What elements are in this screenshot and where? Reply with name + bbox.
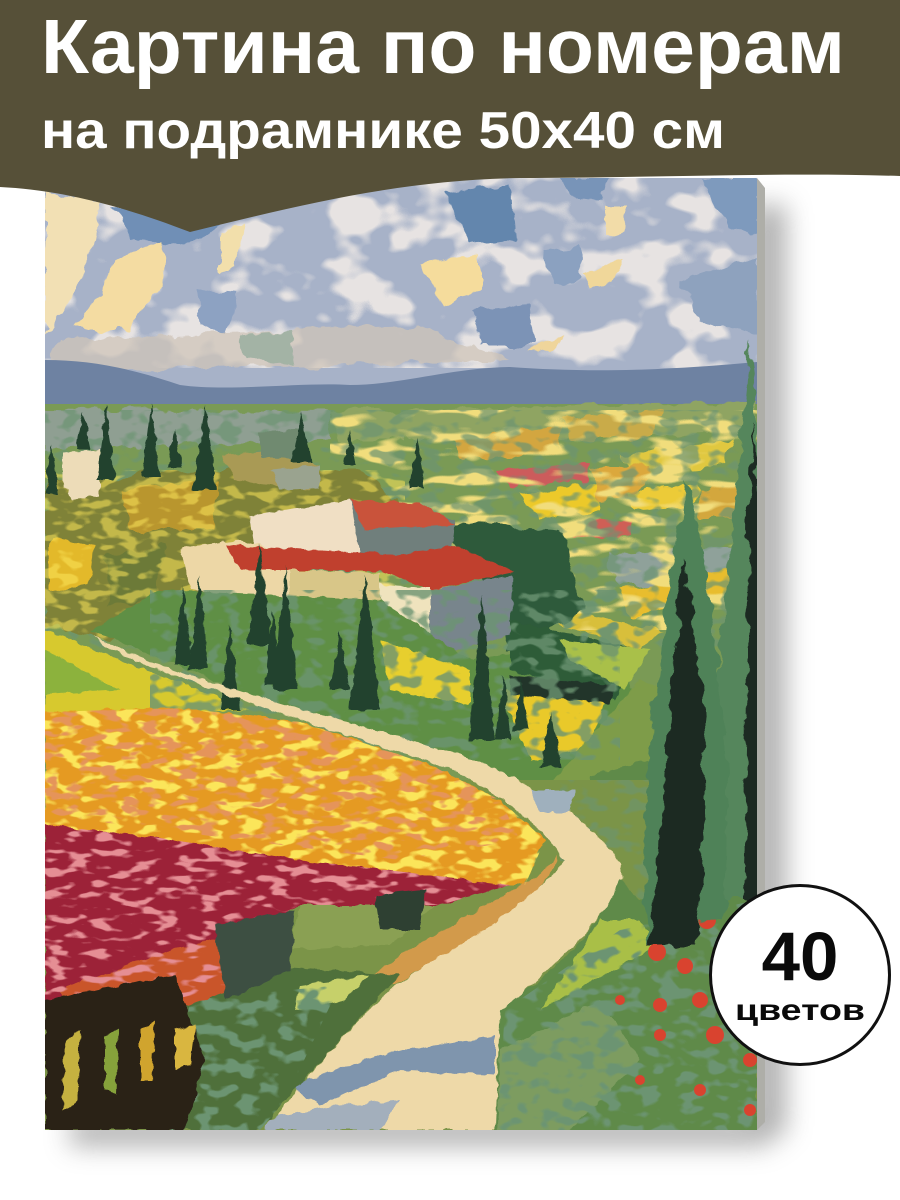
red vineyard blots bbox=[45, 825, 510, 1000]
badge: 40 colours: цветов bbox=[735, 994, 865, 1027]
canvas side edge bbox=[757, 178, 765, 1130]
painting: tuscan landscape bbox=[45, 178, 771, 1140]
foreground flower slope bbox=[495, 880, 757, 1140]
header ribbon bbox=[0, 0, 900, 232]
canvas drop shadow bbox=[70, 205, 786, 1146]
flower slope texture bbox=[497, 900, 757, 1130]
red flowers bbox=[615, 911, 757, 1116]
subtitle: на подрамнике 50х40 см bbox=[41, 102, 725, 160]
distant white house bbox=[62, 450, 100, 500]
winding road bbox=[45, 636, 757, 1130]
small cypress trees bbox=[45, 402, 561, 767]
dark vine rows bbox=[45, 890, 425, 1130]
red vineyard bbox=[45, 824, 510, 1006]
left tree mass bbox=[45, 470, 585, 650]
distant fields bbox=[45, 402, 757, 784]
sky bbox=[45, 178, 757, 388]
midground texture bbox=[330, 410, 757, 630]
vineyard orange blots bbox=[45, 708, 520, 860]
mountains bbox=[45, 360, 757, 404]
vineyard yellow blots bbox=[45, 708, 545, 885]
title: Картина по номерам bbox=[41, 4, 845, 90]
vineyard lower ground bbox=[170, 855, 558, 1130]
badge: 40 colours bbox=[710, 886, 890, 1064]
foreground meadow bbox=[45, 590, 658, 780]
badge: 40 colours: 40 bbox=[762, 918, 838, 995]
hilltop houses bbox=[222, 430, 320, 490]
lower ground shading bbox=[170, 985, 340, 1130]
main villa bbox=[180, 500, 515, 658]
large cypress trees bbox=[644, 340, 771, 945]
orange and yellow vineyard bbox=[45, 708, 545, 885]
